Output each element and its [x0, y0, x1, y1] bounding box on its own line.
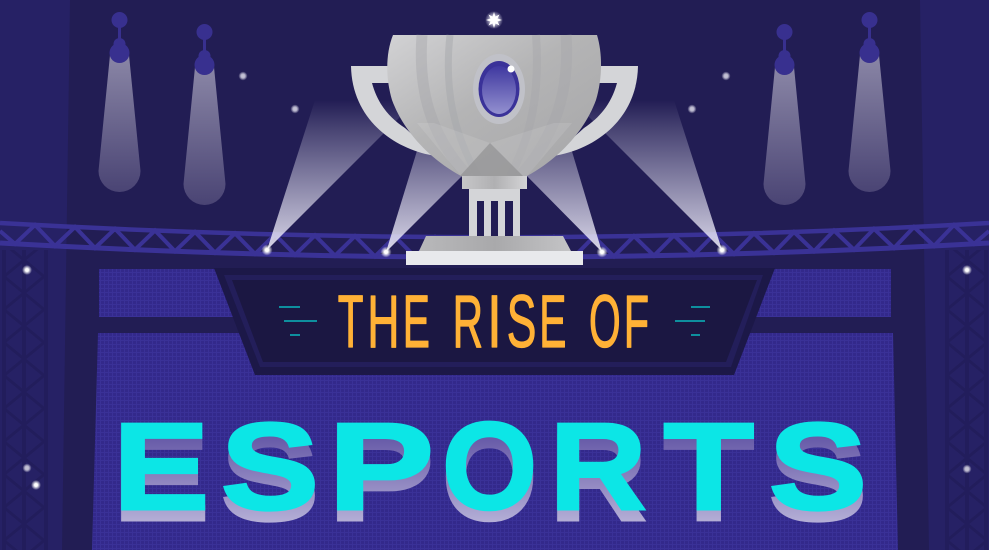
ESPORTS drop shadow: E: [113, 408, 209, 547]
ESPORTS letters: O: [442, 397, 537, 536]
side bar left: [99, 317, 240, 333]
ESPORTS drop shadow: [113, 408, 867, 547]
title word: ESPORTS: [113, 397, 867, 547]
lighting truss: [0, 223, 989, 257]
hanging stage lamp 4: [848, 12, 890, 192]
icon: star above trophy: [485, 11, 503, 29]
ESPORTS letters: R: [550, 398, 647, 536]
title line: THE RISE OF: H: [367, 280, 399, 363]
trophy gem highlight: [508, 66, 514, 72]
trophy base: [419, 236, 571, 251]
title line: THE RISE OF: R: [453, 279, 483, 363]
trophy cup ribs: [421, 35, 567, 176]
inner left spotlight beam: [386, 128, 500, 252]
inner right spotlight beam: [489, 128, 602, 252]
ESPORTS drop shadow: S: [769, 408, 867, 547]
left lighting tower: [2, 250, 48, 550]
trophy: [351, 35, 638, 265]
trophy left handle: [351, 66, 436, 156]
title line: THE RISE OF: [338, 279, 649, 363]
title line: THE RISE OF: I: [487, 280, 502, 363]
ESPORTS drop shadow: T: [663, 408, 754, 546]
light overlap diamond: [460, 143, 523, 176]
right overhead spotlight beam: [569, 100, 722, 250]
trophy gem: [478, 61, 520, 117]
trophy right handle: [553, 66, 638, 156]
title line: THE RISE OF: E: [539, 280, 566, 363]
trophy plinth: [406, 251, 583, 265]
left speed dashes: [279, 307, 317, 335]
sparkle lights: [22, 72, 972, 490]
hanging stage lamp 3: [764, 24, 806, 205]
ESPORTS letters: [113, 397, 867, 536]
hanging stage lamp 1: [98, 12, 140, 192]
title banner: [214, 268, 775, 375]
side bar right: [749, 317, 894, 333]
ESPORTS letters: S: [769, 397, 867, 536]
ESPORTS drop shadow: S: [221, 408, 319, 547]
trophy collar: [462, 176, 527, 189]
ESPORTS drop shadow: P: [328, 409, 434, 547]
right side column: [920, 0, 989, 550]
hanging stage lamp 2: [184, 24, 226, 205]
ESPORTS letters: P: [328, 398, 434, 536]
left overhead spotlight beam: [267, 100, 420, 250]
title line: THE RISE OF: E: [403, 280, 430, 363]
trophy stem: [469, 189, 520, 236]
video screen: [92, 269, 898, 550]
trophy stem slots: [477, 201, 513, 236]
spotlight lamps on truss: [262, 244, 728, 258]
ESPORTS letters: E: [113, 397, 209, 536]
ESPORTS drop shadow: O: [442, 408, 537, 547]
title line: THE RISE OF: F: [624, 280, 649, 363]
ESPORTS letters: S: [221, 397, 319, 536]
title line: THE RISE OF: T: [338, 279, 363, 363]
trophy gem setting: [473, 54, 525, 124]
title line: THE RISE OF: O: [589, 280, 621, 363]
title line: THE RISE OF: S: [507, 280, 536, 363]
trophy cup: [387, 35, 601, 176]
right speed dashes: [675, 307, 710, 335]
light crossing over cup: [417, 123, 572, 176]
left side column: [0, 0, 70, 550]
trophy gem facet: [482, 66, 516, 114]
ESPORTS letters: T: [663, 397, 754, 535]
ESPORTS drop shadow: R: [550, 409, 647, 547]
right lighting tower: [945, 250, 988, 550]
